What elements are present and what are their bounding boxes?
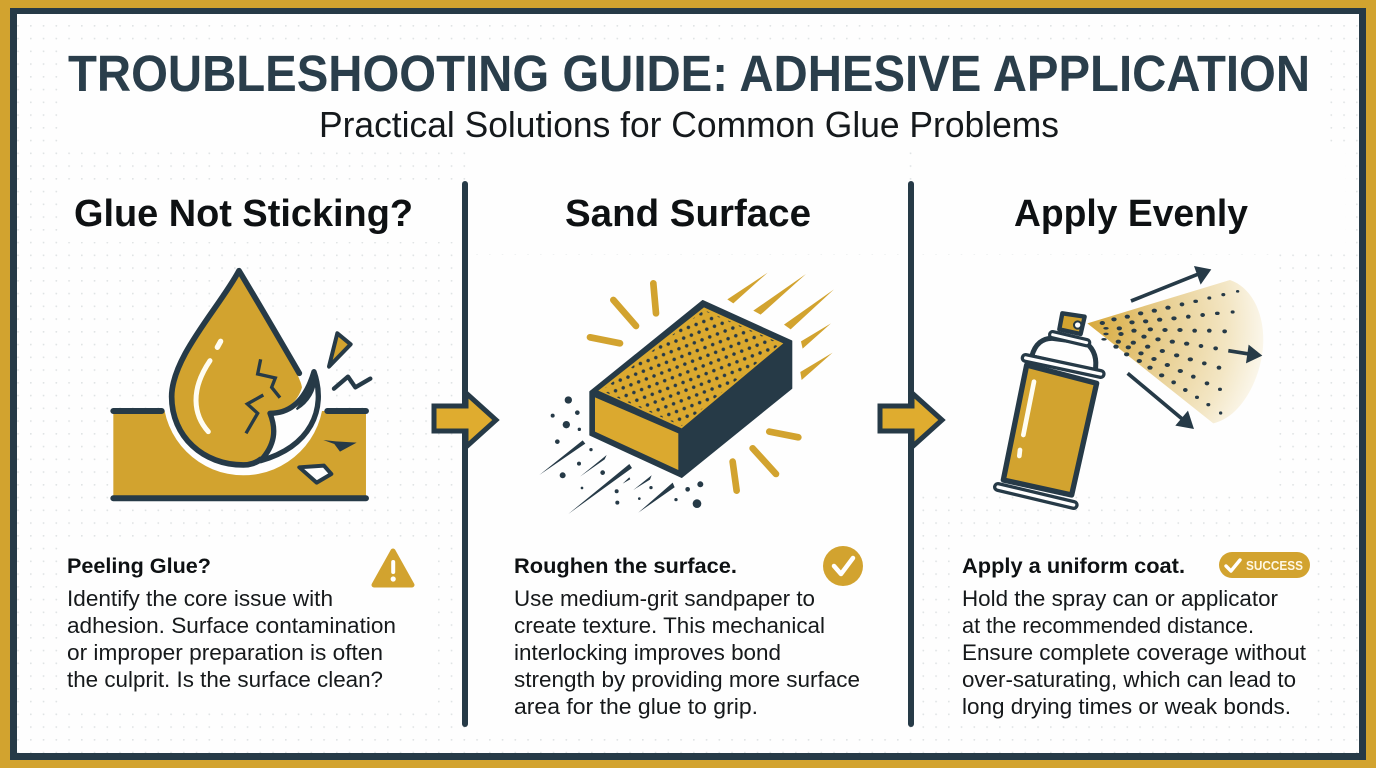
icon: sanding block (539, 273, 834, 514)
body text: apply a uniform coat: Ensure complete coverage without (962, 640, 1307, 665)
icon: check badge (823, 546, 863, 586)
body text: apply a uniform coat (962, 586, 1307, 719)
body text: peeling glue: the culprit. Is the surface clean? (67, 667, 383, 692)
title: TROUBLESHOOTING GUIDE: ADHESIVE APPLICATION (68, 45, 1310, 102)
icon: spray can (998, 266, 1263, 505)
body text: apply a uniform coat: at the recommended distance. (962, 613, 1254, 638)
body text: roughen the surface: strength by providing more surface (514, 667, 860, 692)
panel: sand surface (514, 193, 863, 719)
body text: apply a uniform coat: over-saturating, which can lead to (962, 667, 1296, 692)
subheading: peeling glue: Peeling Glue? (67, 555, 211, 578)
body text: peeling glue: adhesion. Surface contamination (67, 613, 396, 638)
subheading: roughen the surface: Roughen the surface. (514, 555, 737, 578)
heading: glue not sticking: Glue Not Sticking? (74, 193, 413, 235)
body text: peeling glue: Identify the core issue with (67, 586, 333, 611)
icon: warning triangle (374, 551, 412, 585)
heading: apply evenly: Apply Evenly (1014, 193, 1248, 235)
subtitle: Practical Solutions for Common Glue Problems (319, 104, 1059, 145)
body text: roughen the surface: create texture. This mechanical (514, 613, 825, 638)
body text: roughen the surface (514, 586, 860, 719)
body text: roughen the surface: area for the glue to grip. (514, 694, 758, 719)
heading: sand surface: Sand Surface (565, 193, 811, 235)
body text: apply a uniform coat: long drying times or weak bonds. (962, 694, 1291, 719)
body text: apply a uniform coat: Hold the spray can or applicator (962, 586, 1279, 611)
body text: roughen the surface: Use medium-grit sandpaper to (514, 586, 815, 611)
panel: apply evenly (962, 193, 1310, 719)
divider and arrow 1 (434, 181, 496, 727)
body text: roughen the surface: interlocking improves bond (514, 640, 781, 665)
body text: peeling glue (67, 586, 396, 692)
body text: peeling glue: or improper preparation is often (67, 640, 383, 665)
badge: success: SUCCESS (1246, 559, 1303, 573)
panel: glue not sticking (67, 193, 413, 692)
icon: peeling glue drop (113, 271, 370, 498)
subheading: apply a uniform coat: Apply a uniform coat. (962, 555, 1185, 578)
divider and arrow 2 (880, 181, 942, 727)
badge: success (1219, 552, 1310, 578)
